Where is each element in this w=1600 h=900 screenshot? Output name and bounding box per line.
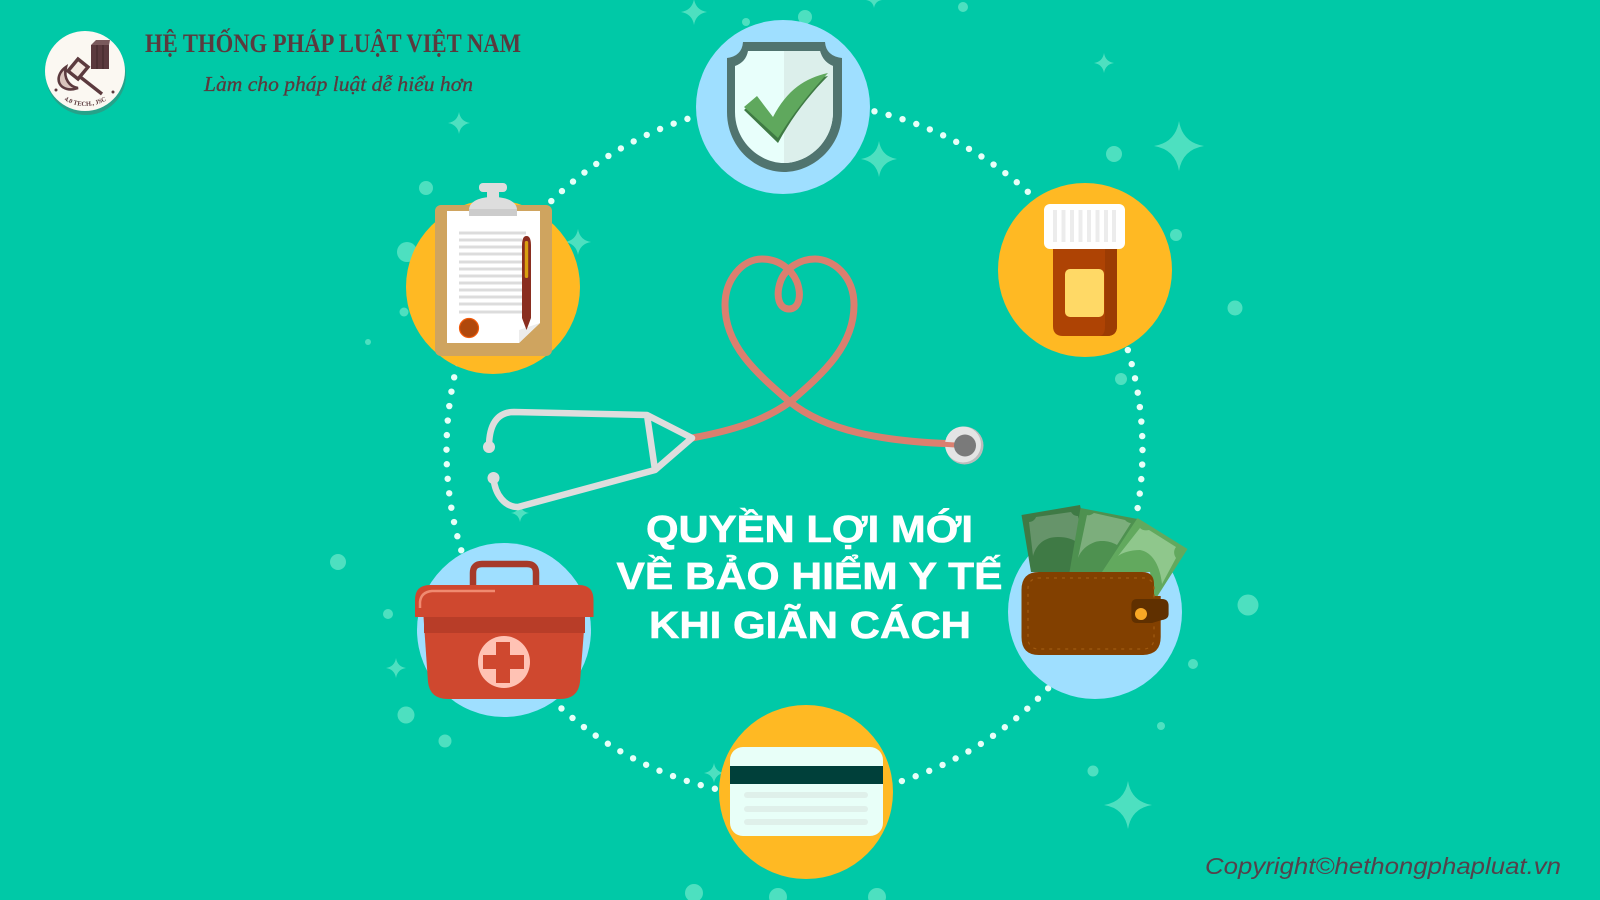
- header title: HỆ THỐNG PHÁP LUẬT VIỆT NAM: [145, 29, 521, 58]
- header logo: [45, 31, 126, 115]
- main title: VỀ BẢO HIỂM Y TẾ: [616, 553, 1002, 598]
- icon: wallet with money: [1008, 505, 1188, 699]
- header logo: 4.0 TECH., JSC: [64, 96, 106, 106]
- dotted ring connecting the icons: [446, 102, 1142, 798]
- icon: first aid kit: [415, 543, 594, 717]
- main title: KHI GIÃN CÁCH: [649, 603, 971, 647]
- background sparkles and dots: [330, 0, 1258, 900]
- main title: QUYỀN LỢI MỚI: [646, 507, 973, 551]
- copyright: Copyright©hethongphapluat.vn: [1205, 853, 1561, 879]
- icon: medicine bottle: [998, 183, 1172, 357]
- icon: stethoscope heart: [483, 259, 984, 507]
- icon: health insurance card: [719, 705, 893, 879]
- header tagline: Làm cho pháp luật dễ hiểu hơn: [203, 72, 473, 96]
- icon: clipboard with document: [406, 183, 580, 374]
- icon: shield with check: [696, 20, 870, 194]
- main title: [616, 507, 1002, 647]
